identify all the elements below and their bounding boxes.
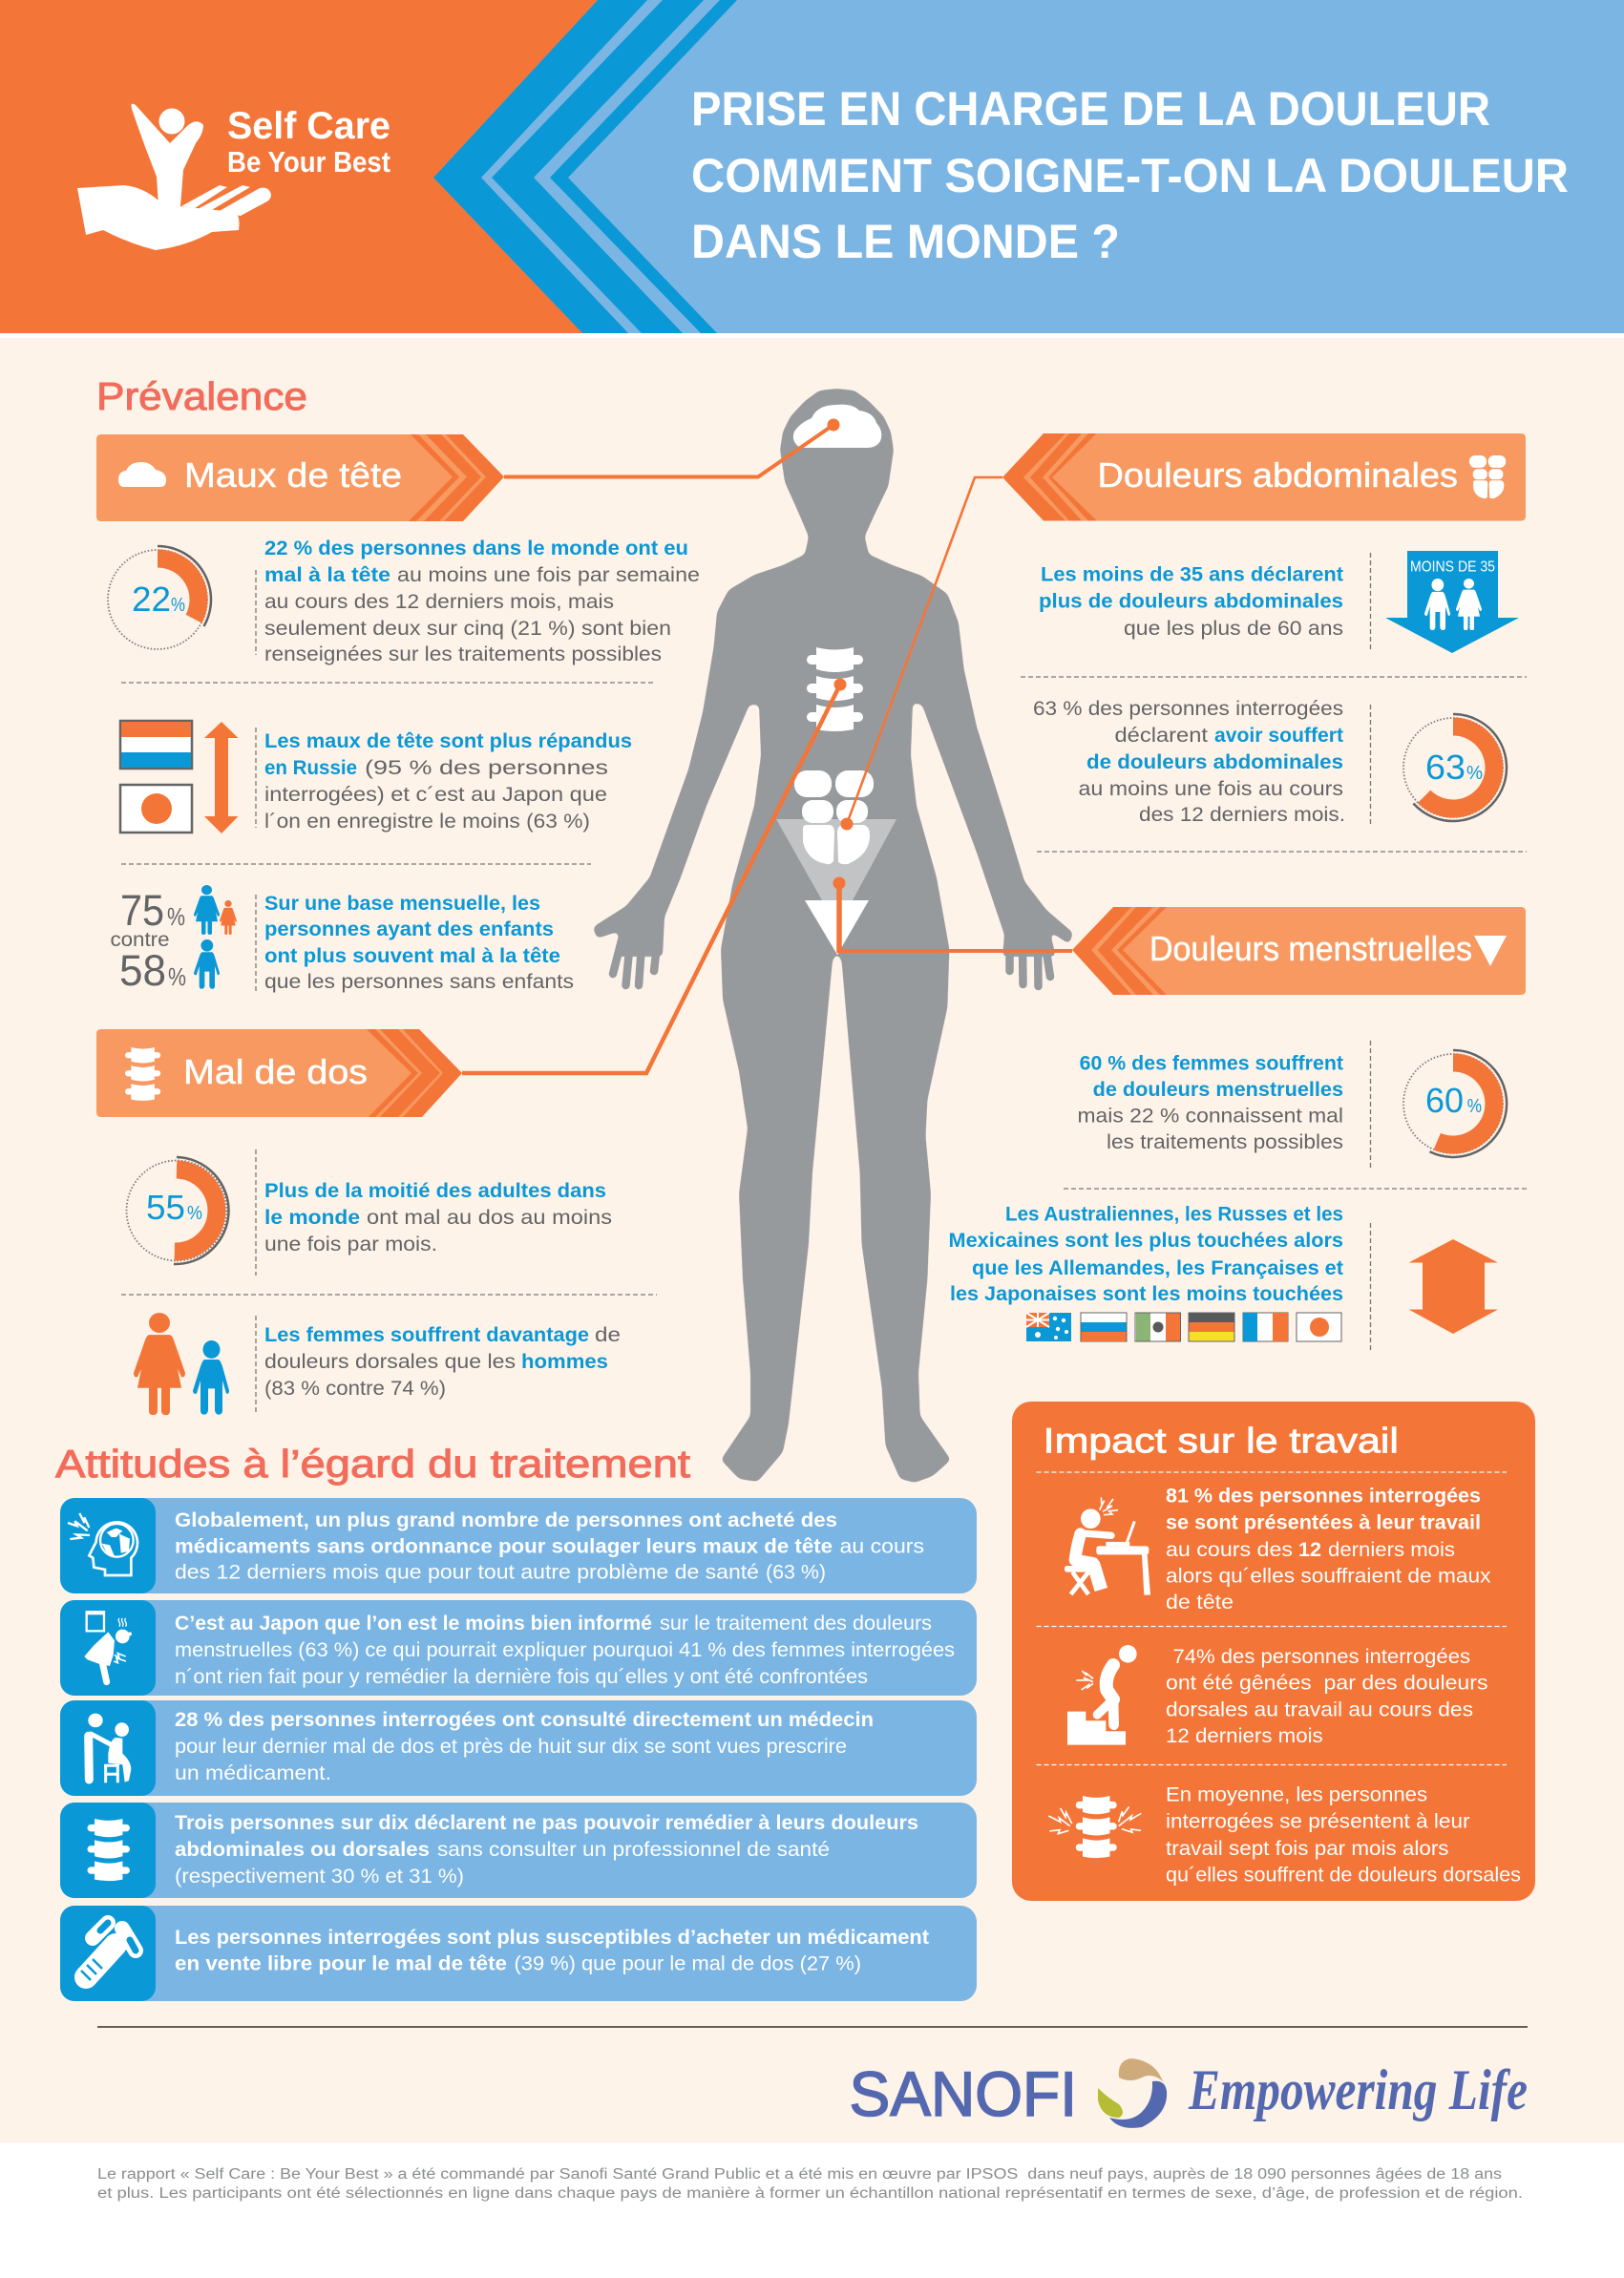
icon: spine	[807, 647, 863, 731]
text: femmes et hommes: (83 % contre 74 %)	[264, 1377, 446, 1400]
stat: 22% donut: 22	[132, 580, 171, 619]
text: 74%: dorsales au travail au cours des	[1166, 1699, 1473, 1720]
banner: Douleurs abdominales: Douleurs abdominales	[1098, 455, 1458, 495]
stat: 60% donut	[1403, 1050, 1507, 1157]
text: 60 % des femmes	[1077, 1051, 1343, 1153]
text: moins de 35 ans: plus de douleurs abdominales	[1039, 590, 1343, 613]
text: personnes ayant des enfants: que les personnes sans enfants	[264, 970, 574, 993]
icon: woman bent over with cramps	[84, 1611, 132, 1682]
header banner	[0, 0, 1624, 333]
text: 81 %: au cours des	[1166, 1539, 1293, 1561]
icon: flag Russia	[1081, 1313, 1127, 1341]
text: maux de tête en Russie	[264, 729, 632, 833]
stat: 63% donut: 63	[1425, 748, 1466, 787]
fingers	[613, 940, 1050, 986]
icon: sanofi bird	[1098, 2058, 1167, 2128]
icon: spine	[125, 1047, 160, 1101]
banner: Douleurs abdominales	[1002, 433, 1526, 521]
human body figure	[593, 389, 1073, 1483]
stat: 55% donut: 55	[146, 1188, 185, 1227]
text: plus de la moitié: une fois par mois.	[264, 1233, 437, 1255]
banner: Mal de dos: Mal de dos	[183, 1052, 368, 1091]
text: en moyenne: qu´elles souffrent de douleurs dorsales	[1166, 1864, 1521, 1887]
panel: attitude row 5: en vente libre pour le mal de tête	[175, 1953, 507, 1974]
text: 22 % des personnes	[264, 537, 700, 665]
icon: flag Japan	[1297, 1313, 1341, 1341]
text: plus de la moitié: le monde	[264, 1206, 360, 1229]
icon: blue down arrow, moins de 35	[1385, 551, 1519, 653]
text: 22 % des personnes: mal à la tête	[264, 563, 390, 586]
text: femmes et hommes: hommes	[521, 1350, 608, 1373]
text: 81 %: se sont présentées à leur travail	[1166, 1512, 1481, 1533]
heading: Prévalence: Prévalence	[96, 374, 307, 418]
text: 22 % des personnes: 22 % des personnes dans le monde ont eu	[264, 537, 688, 559]
text: 81 %: 12	[1298, 1539, 1321, 1561]
panel: attitude row 3: un médicament.	[175, 1762, 331, 1784]
icon: brain	[793, 405, 881, 448]
stat: 75% contre 58%: %	[167, 902, 185, 931]
text: 81 %	[1166, 1486, 1491, 1614]
stat: 55% donut: %	[187, 1203, 202, 1224]
icon: head with globe	[68, 1513, 137, 1575]
icon: doctor and patient	[88, 1714, 131, 1782]
stat: 75% contre 58%: 75	[120, 886, 164, 935]
text: 74%: 74% des personnes interrogées	[1172, 1646, 1470, 1668]
panel: attitude row 5	[60, 1906, 977, 2001]
text: 60 % des femmes: mais 22 % connaissent mal	[1077, 1104, 1343, 1127]
text: maux de tête en Russie: Les maux de tête sont plus répandus	[264, 729, 632, 752]
logo: Sanofi Empowering Life: SANOFI	[850, 2058, 1077, 2129]
flags: six countries	[1026, 1313, 1341, 1341]
arrow: large up-down	[1409, 1239, 1498, 1334]
text: plus de la moitié: Plus de la moitié des adultes dans	[264, 1179, 606, 1202]
panel: attitude row 4: abdominales ou dorsales	[175, 1839, 430, 1861]
text: maux de tête en Russie: en Russie	[264, 756, 357, 779]
panel: attitude row 3: pour leur dernier mal de dos et près de huit sur dix se sont vues prescrire	[175, 1736, 847, 1758]
logo text: Be Your Best	[227, 145, 390, 179]
panel: attitude row 5: (39 %) que pour le mal de dos (27 %)	[514, 1953, 861, 1974]
text: Australiennes, Russes, Mexicaines	[949, 1203, 1343, 1305]
panel: attitude row 4: Trois personnes sur dix déclarent ne pas pouvoir remédier à leurs douleurs	[175, 1812, 918, 1834]
text: 81 %: alors qu´elles souffraient de maux	[1166, 1566, 1491, 1587]
main title: PRISE EN CHARGE DE LA DOULEUR	[691, 82, 1490, 136]
panel: attitude row 2: sur le traitement des douleurs	[660, 1613, 932, 1635]
panel: attitude row 4	[60, 1803, 977, 1898]
text: en moyenne: En moyenne, les personnes	[1166, 1783, 1427, 1806]
logo: Sanofi Empowering Life	[850, 2058, 1528, 2129]
icon: flag France	[1243, 1313, 1288, 1341]
icon: cloud	[118, 462, 166, 487]
panel: attitude row 1: Globalement, un plus grand nombre de personnes ont acheté des	[175, 1509, 837, 1531]
text: en moyenne: interrogées se présentent à leur	[1166, 1810, 1470, 1833]
panel: attitude row 1: (63 %)	[766, 1562, 826, 1583]
text: 81 %: 81 % des personnes interrogées	[1166, 1486, 1481, 1507]
footer note	[97, 2166, 1523, 2202]
stat: 22% donut: %	[171, 595, 185, 616]
panel: attitude row 5: Les personnes interrogées sont plus susceptibles d’acheter un médicament	[175, 1927, 929, 1949]
icon: Japan flag	[120, 785, 192, 833]
icon: flag Australia	[1026, 1313, 1071, 1341]
text: femmes et hommes	[264, 1323, 621, 1400]
footer note: Le rapport « Self Care : Be Your Best » a été commandé par Sanofi Santé Grand Public et a été mis en œuvre par IPSOS dans neuf pays, auprès de 18 090 personnes âgées de 18 ans	[97, 2166, 1502, 2183]
text: 81 %: de tête	[1166, 1592, 1234, 1614]
text: moins de 35 ans	[1039, 563, 1343, 640]
text: personnes ayant des enfants: ont plus souvent mal à la tête	[264, 944, 560, 967]
stat: 55% donut	[126, 1157, 229, 1264]
banner: Maux de tête: Maux de tête	[184, 455, 402, 495]
stat: 75% contre 58%: contre	[111, 928, 170, 951]
stat: 75% contre 58%: 58	[119, 946, 166, 995]
icon: blue down arrow, moins de 35: MOINS DE 35	[1410, 559, 1495, 575]
uterus triangle	[805, 900, 869, 955]
panel: attitude row 4: (respectivement 30 % et 31 %)	[175, 1866, 464, 1888]
icon: spine	[88, 1819, 130, 1881]
icon: person at desk	[1065, 1497, 1150, 1595]
text: femmes et hommes: de	[595, 1323, 621, 1346]
text: 63 % abdominales: avoir souffert	[1214, 724, 1343, 747]
stat: 75% contre 58%: %	[168, 962, 186, 991]
logo text: Self Care	[227, 105, 390, 147]
icon: person on stairs with back pain	[1067, 1645, 1137, 1745]
icon: spine with pain bolts	[1048, 1796, 1141, 1858]
text: 63 % abdominales	[1033, 697, 1345, 826]
icon: Russia flag	[120, 721, 192, 769]
banner: Douleurs menstruelles: Douleurs menstruelles	[1149, 929, 1472, 968]
text: personnes ayant des enfants: personnes ayant des enfants	[264, 918, 554, 940]
text: moins de 35 ans: Les moins de 35 ans déclarent	[1041, 563, 1343, 586]
text: 63 % abdominales: des 12 derniers mois.	[1139, 803, 1345, 826]
text: personnes ayant des enfants: Sur une base mensuelle, les	[264, 892, 540, 915]
text: femmes et hommes: Les femmes souffrent davantage	[264, 1323, 589, 1346]
text: 22 % des personnes: au moins une fois par semaine	[397, 563, 700, 586]
stat: 22% donut	[108, 546, 211, 649]
logo text	[227, 105, 390, 179]
panel: attitude row 1: des 12 derniers mois que pour tout autre problème de santé	[175, 1562, 759, 1583]
main title: DANS LE MONDE ?	[691, 215, 1120, 268]
text: 81 %: derniers mois	[1328, 1539, 1455, 1561]
text: maux de tête en Russie: l´on en enregistre le moins (63 %)	[264, 810, 590, 833]
banner: Mal de dos	[96, 1029, 462, 1117]
banner: Douleurs menstruelles	[1072, 907, 1526, 995]
panel: attitude row 4: sans consulter un professionnel de santé	[437, 1839, 830, 1861]
footer note: et plus. Les participants ont été sélectionnés en ligne dans chaque pays de manière à former un échantillon national représentatif en termes de sexe, d’âge, de profession et de région.	[97, 2185, 1523, 2202]
stat: 75% contre 58%	[111, 886, 186, 995]
text: Australiennes, Russes, Mexicaines: que les Allemandes, les Françaises et	[972, 1256, 1343, 1279]
text: plus de la moitié	[264, 1179, 612, 1255]
stat: 63% donut	[1403, 714, 1507, 821]
icon: pills	[81, 1923, 136, 1980]
text: 74%	[1166, 1646, 1487, 1747]
page background	[0, 338, 1624, 2142]
icon: abdomen	[794, 770, 874, 864]
panel: attitude row 3: 28 % des personnes interrogées ont consulté directement un médecin	[175, 1709, 874, 1731]
text: 63 % abdominales: 63 % des personnes interrogées	[1033, 697, 1343, 720]
text: en moyenne: travail sept fois par mois alors	[1166, 1838, 1449, 1860]
text: femmes et hommes: douleurs dorsales que les	[264, 1350, 516, 1373]
icon: triangle	[1474, 936, 1507, 966]
panel: attitude row 2	[60, 1600, 977, 1696]
text: 60 % des femmes: les traitements possibles	[1107, 1130, 1343, 1153]
text: moins de 35 ans: que les plus de 60 ans	[1124, 617, 1343, 640]
text: 63 % abdominales: au moins une fois au cours	[1079, 777, 1343, 800]
text: Australiennes, Russes, Mexicaines: les Japonaises sont les moins touchées	[950, 1282, 1343, 1305]
panel: attitude row 2: menstruelles (63 %) ce qui pourrait expliquer pourquoi 41 % des femmes interrogées	[175, 1639, 955, 1661]
icon: flag Mexico	[1135, 1313, 1180, 1341]
panel: attitude row 2: C’est au Japon que l’on est le moins bien informé	[175, 1613, 652, 1635]
banner: Maux de tête	[96, 434, 504, 521]
icon: person without child	[194, 939, 220, 989]
logo: hand and figure	[77, 104, 271, 250]
panel: attitude row 1: au cours	[840, 1535, 924, 1558]
arrow: double up-down	[204, 722, 239, 833]
heading: Attitudes: Attitudes à l’égard du traitement	[55, 1442, 691, 1486]
text: 63 % abdominales: de douleurs abdominales	[1086, 750, 1343, 773]
icon: woman with child	[194, 885, 237, 935]
text: 22 % des personnes: seulement deux sur cinq (21 %) sont bien	[264, 617, 671, 640]
main title: COMMENT SOIGNE-T-ON LA DOULEUR	[691, 149, 1569, 202]
logo: Sanofi Empowering Life: Empowering Life	[1188, 2058, 1528, 2121]
heading: impact: Impact sur le travail	[1044, 1421, 1399, 1461]
text: 22 % des personnes: au cours des 12 derniers mois, mais	[264, 590, 614, 613]
text: Australiennes, Russes, Mexicaines: Mexicaines sont les plus touchées alors	[949, 1229, 1343, 1252]
main title	[691, 82, 1569, 268]
stat: 60% donut: 60	[1425, 1081, 1464, 1120]
panel: attitude row 2: n´ont rien fait pour y remédier la dernière fois qu´elles y ont été confrontées	[175, 1666, 868, 1688]
text: maux de tête en Russie: (95 % des personnes	[365, 756, 608, 779]
icon: abdomen	[1469, 455, 1506, 498]
stat: 63% donut: %	[1466, 763, 1483, 784]
text: 60 % des femmes: de douleurs menstruelles	[1093, 1078, 1343, 1101]
panel: attitude row 3	[60, 1700, 977, 1796]
text: plus de la moitié: ont mal au dos au moins	[367, 1206, 612, 1229]
text: Australiennes, Russes, Mexicaines: Les Australiennes, les Russes et les	[1005, 1203, 1343, 1226]
text: maux de tête en Russie: interrogées) et c´est au Japon que	[264, 783, 607, 806]
panel: attitude row 1	[60, 1498, 977, 1593]
icon: flag Germany	[1189, 1313, 1234, 1341]
icon: woman and man	[134, 1313, 229, 1415]
text: personnes ayant des enfants	[264, 892, 574, 993]
text: 74%: 12 derniers mois	[1166, 1725, 1323, 1747]
stat: 60% donut: %	[1467, 1096, 1482, 1117]
panel: attitude row 1: médicaments sans ordonnance pour soulager leurs maux de tête	[175, 1535, 833, 1558]
text: en moyenne	[1166, 1783, 1521, 1887]
panel: impact sur le travail	[1012, 1402, 1535, 1901]
text: 63 % abdominales: déclarent	[1115, 724, 1208, 747]
text: 60 % des femmes: 60 % des femmes souffrent	[1080, 1051, 1343, 1074]
connector lines	[462, 418, 1072, 1073]
text: 22 % des personnes: renseignées sur les traitements possibles	[264, 643, 662, 665]
pelvic funnel	[776, 819, 896, 900]
text: 74%: ont été gênées par des douleurs	[1166, 1673, 1487, 1694]
